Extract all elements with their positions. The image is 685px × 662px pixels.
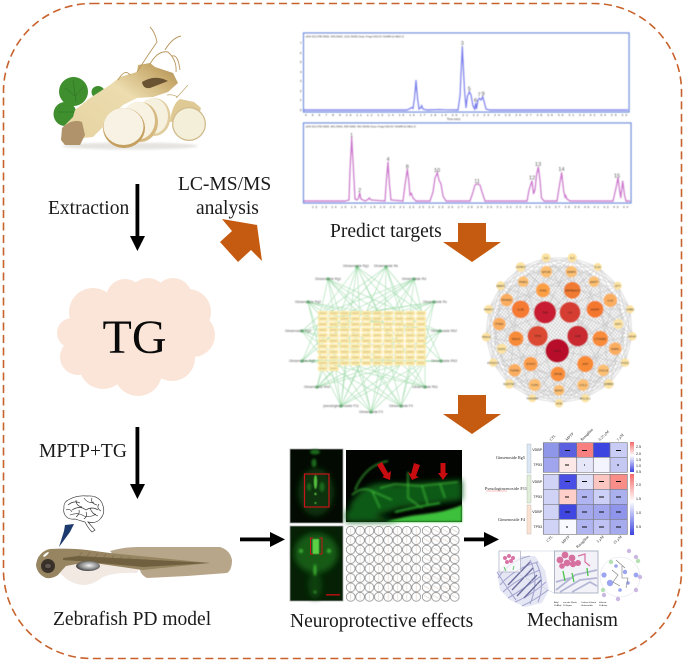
icon: brain (64, 496, 104, 532)
node labels: SQSTM1 (503, 382, 516, 386)
hub nodes (536, 283, 550, 297)
node labels (482, 256, 636, 406)
icon: green leaves (54, 77, 104, 126)
node labels: APOE (554, 372, 562, 376)
icon: lightning bolt (59, 524, 74, 547)
node labels: GFAP (628, 334, 636, 338)
region box (304, 474, 329, 507)
label: zebrafish PD model: Zebrafish PD model (53, 609, 212, 630)
chart: heatmap: 2.0 (636, 483, 641, 487)
bottom column labels: MPTP (561, 535, 571, 545)
row labels: TP53 (533, 525, 542, 529)
chart: heatmap: 0.5 (636, 525, 641, 529)
arrow: extraction (130, 184, 145, 251)
docking legend: van der Waals (563, 601, 578, 604)
row 3 (543, 474, 559, 489)
node labels: PRKN (482, 335, 490, 339)
compound labels: Ginsenoside Rg2 (295, 300, 321, 304)
node labels: IL2 (570, 256, 575, 260)
icon: root slices (138, 98, 170, 136)
node labels: SOD1 (498, 347, 506, 351)
cloud: TG (57, 278, 215, 396)
node labels: PTEN (495, 322, 503, 326)
group bars (527, 444, 531, 473)
chart: chromatogram bottom: 14 (558, 167, 565, 173)
bottom column labels: CTL (546, 534, 554, 543)
compound labels: Ginsenoside Rg5 (496, 455, 525, 460)
docking legend: Carbon H-bond (581, 601, 597, 604)
arrow: orange down 2 (443, 395, 501, 434)
chart: chromatogram bottom: 13 (535, 162, 541, 168)
chart: chromatogram top: 9 (481, 92, 485, 98)
compound labels: Ginsenoside Rb3 (431, 359, 457, 363)
node labels: TARDBP (526, 396, 538, 400)
top column labels: CTL (549, 433, 557, 442)
chart: chromatogram bottom: 2 (358, 188, 361, 194)
compound labels: Ginsenoside F3 (359, 410, 383, 414)
node labels: CXCL8 (598, 368, 608, 372)
chart: heatmap (485, 427, 641, 549)
node labels: APP (582, 362, 588, 366)
docking legend: H-bond (599, 602, 607, 604)
compound labels: Ginsenoside Rg1 (343, 264, 369, 268)
chart: chromatogram top: 4 (300, 70, 302, 74)
row 6 (543, 519, 559, 534)
row labels: TP53 (533, 463, 542, 467)
chart: heatmap: 1.0 (636, 464, 641, 468)
compound labels: Ginsenoside Rd (402, 277, 426, 281)
label: extraction: Extraction (48, 198, 129, 219)
row 1 (543, 443, 559, 457)
node labels: MMP2 (496, 284, 505, 288)
chart: chromatogram bottom: 8 (406, 164, 409, 170)
cell borders (543, 443, 627, 534)
compound nodes (300, 265, 443, 414)
chart: heatmap: 0.5 (636, 470, 641, 474)
significance marks (565, 450, 621, 527)
top column labels: 0.25 μM (598, 429, 610, 442)
chart: chromatogram top: 4 5 6 7 8 9 10 11 12 13 14 15 16 17 18 19 20 21 22 23 24 25 26 27 28 29 30 31 32 33 34 35 36 (305, 113, 627, 117)
node labels: BDNF (555, 388, 563, 392)
docking legend: Alkyl (554, 601, 559, 604)
row labels: VDBP (532, 480, 543, 484)
interaction diagram (600, 549, 642, 601)
node labels: CTNNB1 (594, 337, 607, 341)
chart: chromatogram top: 1 (300, 98, 302, 102)
chart: protein interaction network (482, 253, 636, 407)
compound labels: Ginsenoside Rb2 (431, 329, 457, 333)
row 5 (543, 504, 559, 519)
compound labels: Ginsenoside Rg1 (315, 277, 341, 281)
chart: chromatogram bottom: 4 (386, 157, 390, 163)
chart: chromatogram bottom: 15 (614, 174, 620, 180)
node labels: BCL2L1 (580, 396, 591, 400)
chart: chromatogram bottom: 12 (529, 176, 535, 182)
node labels: SNCA (512, 337, 520, 341)
chart: chromatogram bottom: 12 13 14 15 16 17 18 19 20 21 22 23 24 25 26 27 28 29 30 31 32 33 34 35 36 37 38 39 40 41 42 43 44 (312, 205, 628, 209)
chart: chromatogram bottom: 11 (474, 179, 480, 185)
red arrows (377, 462, 448, 480)
arrow: orange diagonal (220, 219, 262, 262)
chart: chromatogram top: 7 (300, 41, 302, 45)
row 4 (543, 489, 559, 504)
node labels: MMP9 (567, 270, 576, 274)
node labels: IL6 (568, 310, 572, 314)
label: MPTP+TG: MPTP+TG (39, 441, 127, 462)
yolk (60, 560, 140, 585)
bottom column labels: Rasagiline (576, 535, 590, 549)
node labels: MTOR (542, 270, 552, 274)
chart: chromatogram top: 7 (477, 92, 481, 98)
eye (41, 559, 55, 573)
row labels (532, 448, 543, 529)
chart: chromatogram top: +ESI EIC(785.5000, 945.5000, 1101.5000) Scan Frag=150.0V SAMPLE-NEG.D (305, 34, 404, 38)
node labels: IL10 (607, 298, 614, 302)
chart: chromatogram top: 0 (300, 108, 302, 112)
compound labels: Ginsenoside Rc (423, 300, 447, 304)
swim bladder (76, 561, 100, 571)
compound labels: Ginsenoside Re (374, 264, 398, 268)
top column labels: Rasagiline (580, 427, 594, 442)
chart: chromatogram top: 6 (300, 51, 302, 55)
chart: chromatogram top: 2 (300, 89, 302, 93)
middle nodes (518, 266, 609, 396)
illustration: zebrafish larva (36, 547, 232, 585)
chart: heatmap: 1.5 (636, 458, 641, 462)
top column labels: 1 μM (616, 433, 625, 442)
docking legend: Pi-Alkyl (554, 604, 562, 607)
node labels: ESR1 (611, 347, 620, 351)
label: predict targets: Predict targets (330, 221, 442, 242)
node labels: IL1A (595, 265, 601, 269)
compound labels: Ginsenoside Rg3 (285, 329, 311, 333)
protein ribbons (497, 556, 548, 606)
top column labels (549, 427, 625, 442)
node labels: IGF1 (615, 322, 622, 326)
node labels: ERBB2 (604, 382, 614, 386)
chart: chromatogram bottom (304, 123, 631, 209)
node labels: STAT3 (526, 362, 535, 366)
node labels: AKT1 (554, 349, 561, 353)
node labels: TGFB1 (510, 368, 520, 372)
tail fin (110, 547, 232, 578)
outer nodes (482, 253, 636, 407)
node labels: TLR4 (531, 383, 539, 387)
body (36, 549, 210, 578)
colour bars (630, 442, 634, 472)
cloud: TG: TG (102, 311, 166, 364)
node labels: IL4 (544, 256, 548, 260)
bottom column labels: 25 μM (613, 534, 623, 545)
docking legend: Pi-Anion (599, 604, 608, 607)
chart: heatmap: 1.5 (636, 497, 641, 501)
compound labels: Ginsenoside F4 (389, 404, 413, 408)
node labels: PINK1 (519, 280, 528, 284)
compound labels: Ginsenoside F4 (498, 517, 526, 522)
docking legend: Unfavorable (581, 604, 594, 607)
panel: fluorescence treated brain (290, 526, 343, 601)
node labels: TNF (542, 310, 548, 314)
row labels: VDBP (532, 510, 543, 514)
bottom column labels: 5 μM (596, 534, 605, 544)
arrow: orange down 1 (443, 223, 501, 262)
chart: heatmap: 1.0 (636, 511, 641, 515)
node labels: PPARG (502, 298, 513, 302)
chart: heatmap: 2.5 (636, 445, 641, 449)
compound labels: pseudoginsenoside F11 (323, 404, 359, 408)
row labels: VDBP (532, 448, 543, 452)
arrow: model to effects (240, 532, 285, 547)
spine stripe (63, 556, 210, 567)
node labels: RPS27A (488, 361, 499, 365)
chart: chromatogram bottom: 10 (434, 168, 440, 174)
row 2 (543, 457, 559, 472)
protein silhouette (497, 556, 549, 607)
top column labels: MPTP (565, 432, 575, 442)
node labels: GRB2 (626, 308, 634, 312)
icon: main root (61, 63, 178, 145)
node labels: HSP90AA1 (565, 288, 580, 292)
node labels: CCL2 (579, 383, 587, 387)
label: LC-MS/MS analysis: LC-MS/MS (178, 174, 271, 195)
label: neuroprotective effects: Neuroprotective effects (290, 611, 473, 632)
node labels: ALB (575, 334, 581, 338)
compound labels: Ginsenoside Rg5 (289, 359, 315, 363)
chart: heatmap: 2.0 (636, 452, 641, 456)
bottom column labels (546, 534, 623, 549)
node labels: LRRK2 (516, 265, 526, 269)
panel: fluorescence vessel detail (346, 450, 462, 522)
node labels: EGFR (591, 308, 600, 312)
chart: compound-target network (285, 264, 457, 414)
docking legend: Pi-Sigma (563, 605, 573, 607)
panel: vessel direction circles (346, 526, 459, 602)
chart: chromatogram top (300, 33, 629, 121)
chart: chromatogram top: 3 (300, 79, 302, 83)
node labels: IL1B (518, 308, 524, 312)
chart: chromatogram top: 5 (468, 86, 471, 92)
arrow: MPTP+TG (130, 427, 145, 499)
scale bar (326, 594, 340, 596)
docking legend (554, 601, 608, 607)
label: LC-MS/MS analysis: analysis (196, 198, 259, 219)
compound labels: Ginsenoside Rh4 (304, 385, 330, 389)
chart: chromatogram top: 6 (474, 98, 477, 104)
node labels: HTT (615, 284, 621, 288)
panel: fluorescence whole brain (290, 449, 343, 523)
small inset (499, 551, 520, 572)
compound labels: Ginsenoside Rk1 (412, 385, 438, 389)
large inset (554, 551, 598, 593)
chart: chromatogram top: 5 (300, 60, 302, 64)
compound labels (285, 264, 457, 414)
gene grid (318, 311, 427, 366)
node labels: MAPT (590, 280, 598, 284)
compound labels (485, 455, 527, 522)
node labels: PARK7 (484, 308, 494, 312)
chart: chromatogram top: 3 (461, 41, 464, 47)
label: mechanism: Mechanism (527, 610, 618, 631)
node labels: HCE (556, 402, 562, 406)
node labels: FGF2 (621, 361, 629, 365)
node labels: IFNG (539, 288, 547, 292)
illustration: protein docking (497, 549, 642, 607)
chart: chromatogram top: Time (min) (447, 117, 460, 121)
compound labels: Pseudoginsenoside F11 (485, 486, 527, 491)
illustration: ginseng roots (54, 27, 206, 150)
row labels: TP53 (533, 495, 542, 499)
node labels: TP53 (534, 334, 542, 338)
arrow: effects to mechanism (464, 532, 499, 547)
chart: chromatogram bottom: 1 (350, 133, 353, 139)
brackets (310, 538, 322, 554)
chart: chromatogram bottom: +ESI EIC(783.5000, 801.5000, 835.5000, 961.5000) Scan Frag=150.0V SAMPLE-NEG.D (305, 124, 416, 128)
